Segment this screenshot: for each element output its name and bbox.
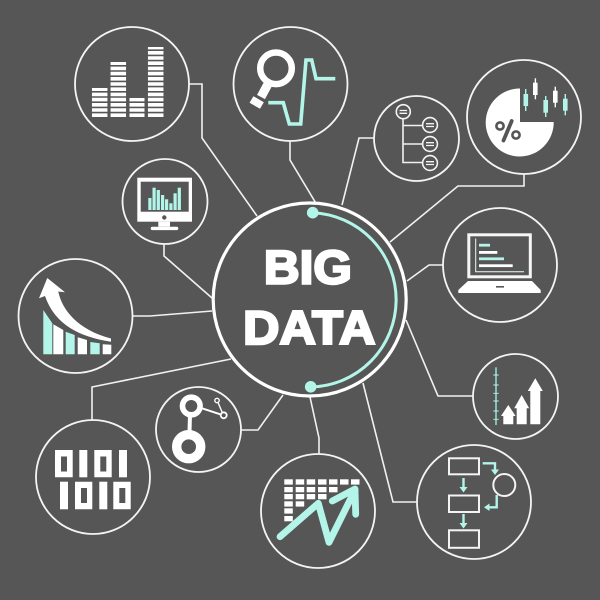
icon: branch lines	[403, 119, 422, 162]
teal arc with end dots	[305, 207, 396, 393]
panel: node graph	[156, 387, 241, 472]
hub ring	[213, 203, 406, 396]
panel: monitor chart	[122, 159, 208, 244]
panel: binary code	[36, 420, 150, 534]
panel: flowchart	[417, 445, 531, 559]
icon: connected nodes	[177, 397, 227, 459]
icon: horizontal bars	[479, 244, 513, 267]
panel: laptop chart	[443, 208, 557, 322]
icon: tick axis	[493, 367, 499, 425]
icon: flow boxes	[449, 458, 515, 548]
panel: equalizer bars	[75, 27, 189, 141]
icon: laptop	[458, 235, 541, 293]
icon: teal screen bars	[148, 188, 181, 210]
icon: three up arrows	[501, 378, 543, 424]
central hub	[213, 203, 406, 396]
panel: rising curve	[18, 259, 132, 373]
icon: percent sign	[496, 121, 520, 140]
icon: zigzag arrow	[280, 489, 356, 542]
icon: curved arrow	[39, 278, 111, 342]
icon: list nodes	[396, 105, 437, 170]
panel: tree list	[374, 96, 459, 181]
title: BIG: BIG	[264, 241, 352, 294]
icon: magnifying glass	[255, 53, 292, 106]
icon: descending bars	[43, 310, 111, 354]
icon: teal signal line	[268, 60, 335, 124]
icon: binary digits 0101 1010	[55, 450, 131, 509]
panel: trend chart	[261, 454, 375, 568]
icon: teal flow arrows	[460, 463, 499, 528]
icon: axes	[476, 238, 524, 272]
panel: growth arrows	[473, 354, 558, 439]
connector lines	[92, 84, 524, 502]
icon: data grid	[284, 479, 360, 521]
icon: striped bar columns	[100, 47, 156, 117]
panel: percentage pie	[467, 60, 581, 174]
panel: magnifier signal	[234, 27, 348, 141]
icon: pie chart	[486, 88, 554, 156]
title: DATA: DATA	[243, 301, 375, 354]
icon: candlesticks	[524, 78, 568, 117]
icon: monitor	[137, 178, 192, 230]
